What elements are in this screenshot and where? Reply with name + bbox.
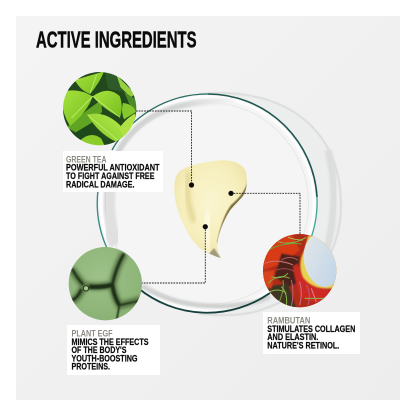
marker dot: plant EGF <box>203 224 208 229</box>
connector: rambutan <box>231 193 300 235</box>
petri dish <box>97 93 341 315</box>
label: plant EGF: YOUTH-BOOSTING <box>72 353 138 364</box>
label: rambutan: RAMBUTAN <box>267 315 310 326</box>
label: plant EGF: OF THE BODY'S <box>72 345 127 356</box>
label: green tea: RADICAL DAMAGE. <box>66 179 134 190</box>
connector: green tea <box>136 111 192 185</box>
label: plant EGF <box>67 325 160 375</box>
label: plant EGF: PROTEINS. <box>72 362 110 373</box>
label: green tea: TO FIGHT AGAINST FREE <box>66 171 155 182</box>
label: green tea <box>63 151 163 192</box>
marker dot: rambutan <box>228 191 234 196</box>
connector: plant EGF <box>141 227 205 283</box>
marker dot: green tea <box>189 182 194 188</box>
title: ACTIVE INGREDIENTS <box>36 26 196 52</box>
label: plant EGF: PLANT EGF <box>72 328 113 340</box>
cream swatch <box>174 160 247 258</box>
label: rambutan <box>263 312 360 354</box>
image: rambutan <box>262 234 336 308</box>
label: rambutan: STIMULATES COLLAGEN <box>267 324 355 335</box>
image: green tea leaves <box>63 72 136 146</box>
label: rambutan: NATURE'S RETINOL. <box>267 340 339 352</box>
image: plant EGF cells <box>68 247 142 320</box>
label: green tea: GREEN TEA <box>66 154 107 165</box>
label: rambutan: AND ELASTIN. <box>267 332 318 343</box>
label: green tea: POWERFUL ANTIOXIDANT <box>66 163 160 174</box>
label: plant EGF: MIMICS THE EFFECTS <box>72 337 149 348</box>
